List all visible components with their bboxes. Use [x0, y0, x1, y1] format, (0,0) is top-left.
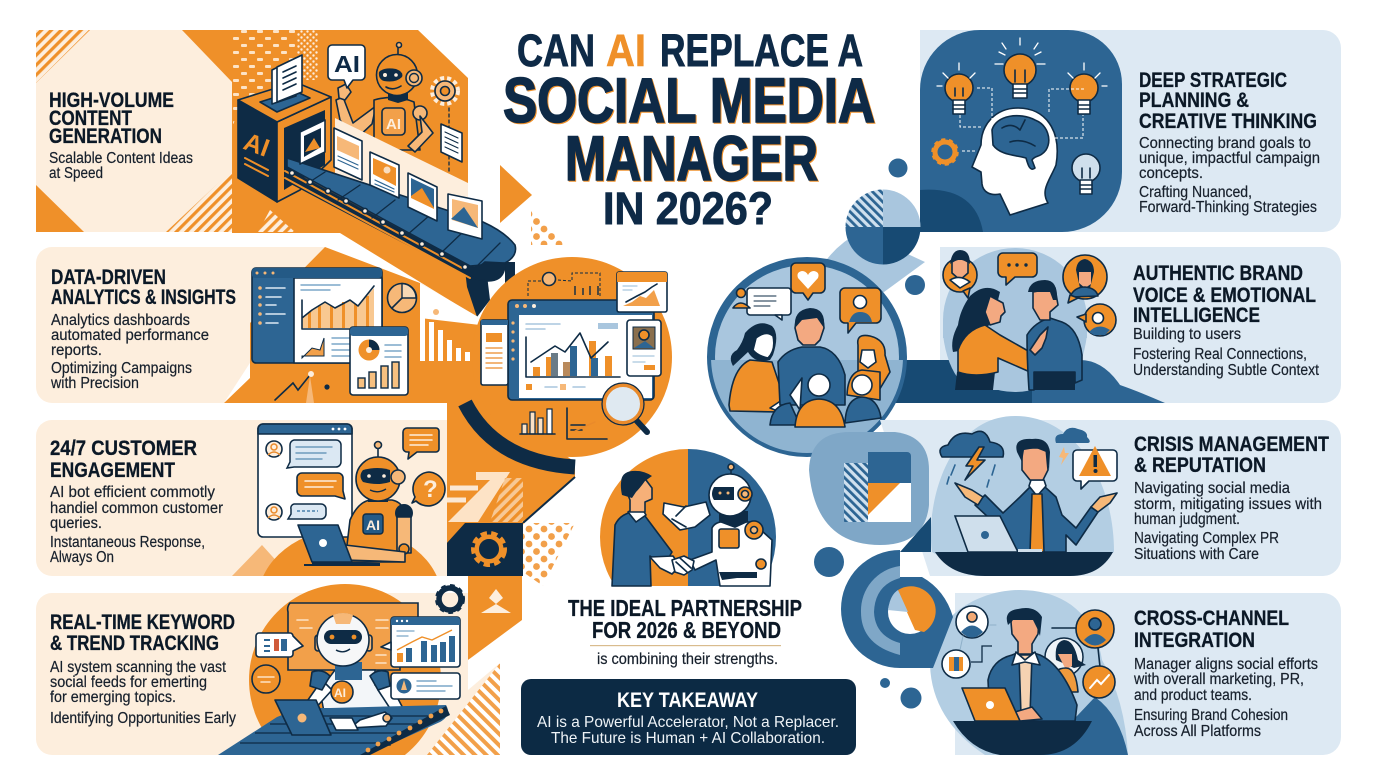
text: strategic planning: DEEP STRATEGIC [1139, 69, 1287, 92]
icon: warning bubble [1073, 446, 1117, 489]
text: analytics: Optimizing Campaigns [51, 360, 192, 377]
navy desk [935, 552, 1113, 576]
text: keyword and trend [50, 611, 236, 727]
text: cross channel: INTEGRATION [1134, 629, 1255, 652]
cream band above conveyor [335, 118, 468, 226]
icon: gear [432, 78, 458, 172]
panel: keyword and trend tracking [36, 584, 500, 768]
icon: trend chart [381, 617, 460, 667]
text: crisis: CRISIS MANAGEMENT [1134, 433, 1329, 456]
text: analytics: ANALYTICS & INSIGHTS [51, 286, 236, 309]
panel: data-driven analytics [36, 247, 490, 403]
icon: conveyor [218, 705, 450, 755]
icon: chat card [733, 288, 791, 320]
icon: orange avatar node [1052, 610, 1114, 667]
text: crisis: Navigating social media [1134, 480, 1290, 497]
icon: woman [729, 323, 788, 412]
lower tint [711, 360, 903, 453]
text: brand voice: Building to users [1133, 326, 1241, 343]
text: brand voice: Understanding Subtle Context [1133, 362, 1320, 379]
text: cross channel: CROSS-CHANNEL [1134, 607, 1289, 630]
title: REPLACE A [660, 25, 863, 76]
icon: decorative dotted triangle [531, 207, 568, 245]
text: customer engagement: handiel common customer [50, 500, 223, 517]
panel: customer engagement [36, 420, 447, 576]
text: customer engagement: Always On [50, 549, 114, 566]
text: strategic planning: Connecting brand goals to [1139, 135, 1311, 152]
icon: orange circle badge [252, 665, 280, 693]
graphic: concentric ring emblem [841, 550, 953, 708]
icon: question bubble: ? [423, 476, 438, 503]
text: keyword and trend: Identifying Opportunities Early [50, 710, 236, 727]
icon: profile bubble [840, 288, 881, 333]
icon: trend line [275, 371, 330, 403]
connector dashes [528, 273, 600, 296]
icon: pie chart [388, 284, 416, 312]
icon: man [778, 308, 845, 410]
heading: the ideal partnership [568, 595, 802, 646]
text: content generation: CONTENT [49, 107, 132, 130]
text: content generation [49, 89, 193, 182]
text: crisis: human judgment. [1134, 511, 1240, 528]
icon: gear [437, 586, 463, 612]
text: customer engagement [50, 437, 223, 566]
analytics circle illustration [472, 257, 672, 457]
panel background [920, 30, 1341, 232]
text: customer engagement: 24/7 CUSTOMER [50, 437, 197, 460]
text: keyword and trend: REAL-TIME KEYWORD [50, 611, 235, 634]
text: strategic planning [1139, 69, 1320, 216]
text: cross channel: and product teams. [1134, 687, 1252, 704]
icon: support robot [345, 442, 413, 562]
callout: key takeaway: KEY TAKEAWAY [617, 689, 758, 712]
icon: left document [481, 320, 508, 385]
text: keyword and trend: & TREND TRACKING [50, 632, 219, 655]
text: crisis: & REPUTATION [1134, 454, 1266, 477]
desk [953, 721, 1092, 755]
panel background [880, 420, 1341, 576]
icon: lower handshake [672, 556, 694, 575]
icon: AI speech bubble: AI [334, 51, 360, 77]
icon: teammate [1045, 638, 1086, 692]
text: cross channel: Across All Platforms [1134, 723, 1261, 740]
icon: upper handshake [663, 502, 710, 530]
icon: analytics dashboard [252, 268, 382, 363]
icon: small feed card [256, 633, 303, 657]
callout: key takeaway: The Future is Human + AI Collaboration. [551, 730, 825, 747]
icon: human [612, 471, 680, 586]
icon: storm cloud [940, 431, 1003, 487]
text: customer engagement: AI bot efficient commotly [50, 484, 215, 501]
icon: worried manager [955, 439, 1117, 552]
icon: AI content box: AI [240, 128, 273, 163]
text: brand voice: INTELLIGENCE [1133, 304, 1260, 327]
icon: right media card [627, 320, 661, 376]
text: cross channel: with overall marketing, PR, [1133, 671, 1304, 688]
graphic: crisis side emblem [809, 432, 931, 577]
heading: the ideal partnership: FOR 2026 & BEYOND [592, 617, 781, 643]
text: keyword and trend: AI system scanning the vast [50, 659, 227, 676]
icon: robot [690, 464, 772, 586]
icon: content robot [336, 42, 433, 152]
icon: laptop [275, 700, 331, 735]
title: MANAGER [565, 124, 818, 194]
text: analytics: reports. [51, 342, 102, 359]
icon: orange laptop [962, 688, 1020, 721]
panel background [36, 30, 232, 232]
icon: question bubble [412, 472, 445, 506]
icon: report window [350, 327, 408, 395]
text: analytics: automated performance [51, 327, 209, 344]
split circle [600, 449, 776, 586]
icon: orange chat bubble [403, 428, 439, 459]
text: analytics: DATA-DRIVEN [51, 266, 166, 289]
icon: seated audience [770, 374, 881, 427]
icon: support robot: AI [366, 517, 380, 533]
panel background [36, 420, 447, 576]
icon: magnifying glass [602, 383, 647, 432]
icon: light bulbs [937, 38, 1107, 194]
text: cross channel: Ensuring Brand Cohesion [1134, 707, 1288, 724]
partnership handshake illustration [600, 449, 776, 586]
icon: mini chart window [617, 272, 667, 312]
icon: trend node [1083, 666, 1115, 698]
people circle illustration [707, 261, 907, 460]
icon: laptop [955, 516, 1042, 552]
icon: mini bar chart [520, 408, 607, 439]
text: brand voice [1133, 262, 1320, 379]
title: IN 2026? [603, 183, 773, 234]
icon: profile card [391, 673, 460, 699]
orange shape behind bot [232, 538, 437, 576]
text: cross channel [1133, 607, 1318, 740]
panel: deep strategic planning [920, 30, 1341, 232]
text: strategic planning: concepts. [1139, 165, 1203, 182]
panel: cross-channel integration [930, 590, 1341, 755]
icon: small document [441, 124, 462, 162]
panel: high-volume content generation [36, 30, 516, 317]
title: SOCIAL MEDIA [503, 66, 875, 136]
title [503, 25, 875, 234]
text: customer engagement: ENGAGEMENT [50, 459, 175, 482]
panel background [940, 247, 1341, 403]
icon: avatar bubble top right [1063, 255, 1107, 303]
icon: logo node [942, 646, 992, 678]
text: analytics: with Precision [50, 375, 139, 392]
head silhouette backdrop [943, 248, 1087, 392]
dark blue illustration shape [920, 30, 1122, 232]
icon: laptop [298, 525, 380, 565]
text: content generation: Scalable Content Ideas [49, 150, 193, 167]
blob behind figure [930, 590, 1128, 755]
icon: backdrop window [288, 603, 418, 670]
icon: man [1027, 280, 1082, 390]
blob behind figure [931, 416, 1114, 576]
icon: main dashboard [508, 300, 654, 400]
text: strategic planning: Forward-Thinking Strategies [1139, 199, 1317, 216]
panel: authentic brand voice [895, 247, 1341, 403]
panel background [36, 247, 325, 403]
orange illustration backdrop [232, 30, 477, 317]
text: strategic planning: unique, impactful campaign [1139, 150, 1320, 167]
icon: conveyor belt [285, 158, 516, 317]
text: content generation: GENERATION [49, 125, 162, 148]
icon: small cloud [1055, 428, 1090, 465]
icon: avatar bubble right [1077, 304, 1116, 336]
title: CAN [517, 25, 595, 76]
panel background [36, 593, 500, 755]
graphic: quartered circle and dots [827, 158, 925, 295]
text: analytics [50, 266, 236, 392]
icon: scanning robot: AI [334, 686, 346, 700]
text: keyword and trend: social feeds for emerting [50, 674, 207, 691]
text: brand voice: AUTHENTIC BRAND [1133, 262, 1303, 285]
text: strategic planning: Crafting Nuanced, [1139, 184, 1252, 201]
text: brand voice: VOICE & EMOTIONAL [1133, 284, 1316, 307]
text: crisis [1134, 433, 1329, 563]
icon: decorative orange triangle [500, 165, 532, 223]
text: customer engagement: queries. [50, 515, 102, 532]
orange circle backdrop [249, 584, 441, 768]
icon: gear [933, 140, 975, 164]
orange backdrop [224, 247, 490, 403]
icon: profile node [956, 606, 996, 650]
icon: AI content box [238, 55, 331, 202]
text: cross channel: Manager aligns social efforts [1134, 656, 1318, 673]
text: strategic planning: CREATIVE THINKING [1139, 110, 1317, 133]
icon: chat window [258, 424, 352, 537]
callout: key takeaway [521, 679, 856, 755]
icon: speech bubble with dots [998, 253, 1037, 285]
text: crisis: Navigating Complex PR [1134, 530, 1279, 547]
icon: woman [952, 288, 1036, 390]
icons: content cards on belt [300, 120, 482, 239]
text: analytics: Analytics dashboards [51, 312, 190, 329]
icon: manager [988, 608, 1077, 721]
icon: heart bubble [791, 263, 825, 300]
text: content generation: HIGH-VOLUME [49, 89, 174, 112]
callout: key takeaway: AI is a Powerful Accelerator, Not a Replacer. [537, 714, 839, 731]
text: crisis: storm, mitigating issues with [1134, 496, 1322, 513]
graphic: orange geometric column [417, 403, 575, 660]
heading: the ideal partnership: THE IDEAL PARTNERSHIP [568, 595, 802, 621]
text: subheading: is combining their strengths. [597, 651, 778, 668]
title: AI [606, 25, 646, 76]
icon: scanning robot [303, 613, 405, 745]
text: crisis: Situations with Care [1134, 546, 1259, 563]
text: content generation: at Speed [49, 165, 103, 182]
text: brand voice: Fostering Real Connections, [1133, 346, 1307, 363]
text: keyword and trend: for emerging topics. [50, 689, 176, 706]
navy base band [895, 360, 1165, 403]
text: strategic planning: PLANNING & [1139, 89, 1249, 112]
text: customer engagement: Instantaneous Response, [50, 534, 205, 551]
panel: crisis management [880, 416, 1341, 576]
icon: AI speech bubble [328, 45, 365, 88]
icon: redhead person [847, 335, 890, 400]
icon: human head with brain [972, 108, 1057, 215]
panel background [955, 593, 1341, 755]
icon: content robot: AI [386, 116, 401, 133]
icon: avatar bubble top left [943, 250, 977, 298]
